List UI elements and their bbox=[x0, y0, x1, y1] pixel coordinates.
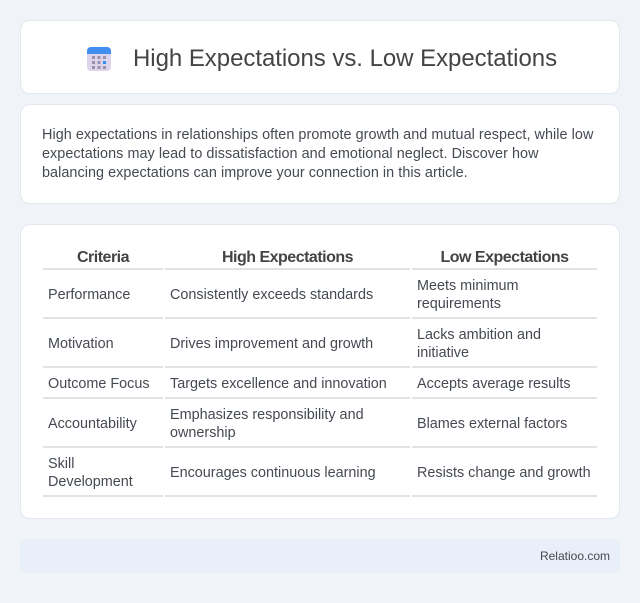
row: skill development: Encourages continuous learning bbox=[170, 465, 376, 481]
row: accountability: Emphasizes responsibility and bbox=[170, 407, 364, 423]
footer credit: Relatioo.com bbox=[540, 549, 610, 563]
row: skill development: Skill bbox=[48, 456, 74, 472]
intro text: expectations may lead to dissatisfaction and emotional neglect. Discover how bbox=[42, 146, 539, 162]
row: performance: Meets minimum bbox=[417, 278, 519, 294]
intro text bbox=[42, 127, 594, 181]
row: skill development bbox=[48, 456, 591, 490]
row: accountability bbox=[48, 407, 567, 441]
intro text: High expectations in relationships often promote growth and mutual respect, while low bbox=[42, 127, 593, 143]
row: outcome focus: Targets excellence and innovation bbox=[170, 376, 387, 392]
row: motivation: Drives improvement and growth bbox=[170, 336, 373, 352]
row: motivation: initiative bbox=[417, 345, 469, 361]
row: accountability: Blames external factors bbox=[417, 416, 567, 432]
row: accountability: ownership bbox=[170, 425, 236, 441]
row: accountability: Accountability bbox=[48, 416, 137, 432]
panel: comparison table bbox=[20, 224, 620, 519]
title: High Expectations vs. Low Expectations bbox=[133, 45, 557, 72]
row: performance: Consistently exceeds standards bbox=[170, 287, 373, 303]
panel: intro bbox=[20, 104, 620, 204]
row: motivation: Lacks ambition and bbox=[417, 327, 541, 343]
row: outcome focus: Outcome Focus bbox=[48, 376, 150, 392]
table header: High Expectations bbox=[222, 249, 353, 266]
row: outcome focus bbox=[48, 376, 571, 392]
intro text: balancing expectations can improve your connection in this article. bbox=[42, 165, 468, 181]
table header: Criteria bbox=[77, 249, 129, 266]
row: motivation: Motivation bbox=[48, 336, 114, 352]
row: motivation bbox=[48, 327, 541, 361]
title card bbox=[20, 20, 620, 94]
row: performance bbox=[48, 278, 519, 312]
footer bar bbox=[20, 539, 620, 573]
row: skill development: Resists change and growth bbox=[417, 465, 591, 481]
row: outcome focus: Accepts average results bbox=[417, 376, 571, 392]
icon: calendar bbox=[87, 47, 111, 71]
row: performance: Performance bbox=[48, 287, 130, 303]
row: skill development: Development bbox=[48, 474, 133, 490]
table header: Low Expectations bbox=[440, 249, 569, 266]
table header bbox=[77, 249, 569, 266]
row: performance: requirements bbox=[417, 296, 501, 312]
